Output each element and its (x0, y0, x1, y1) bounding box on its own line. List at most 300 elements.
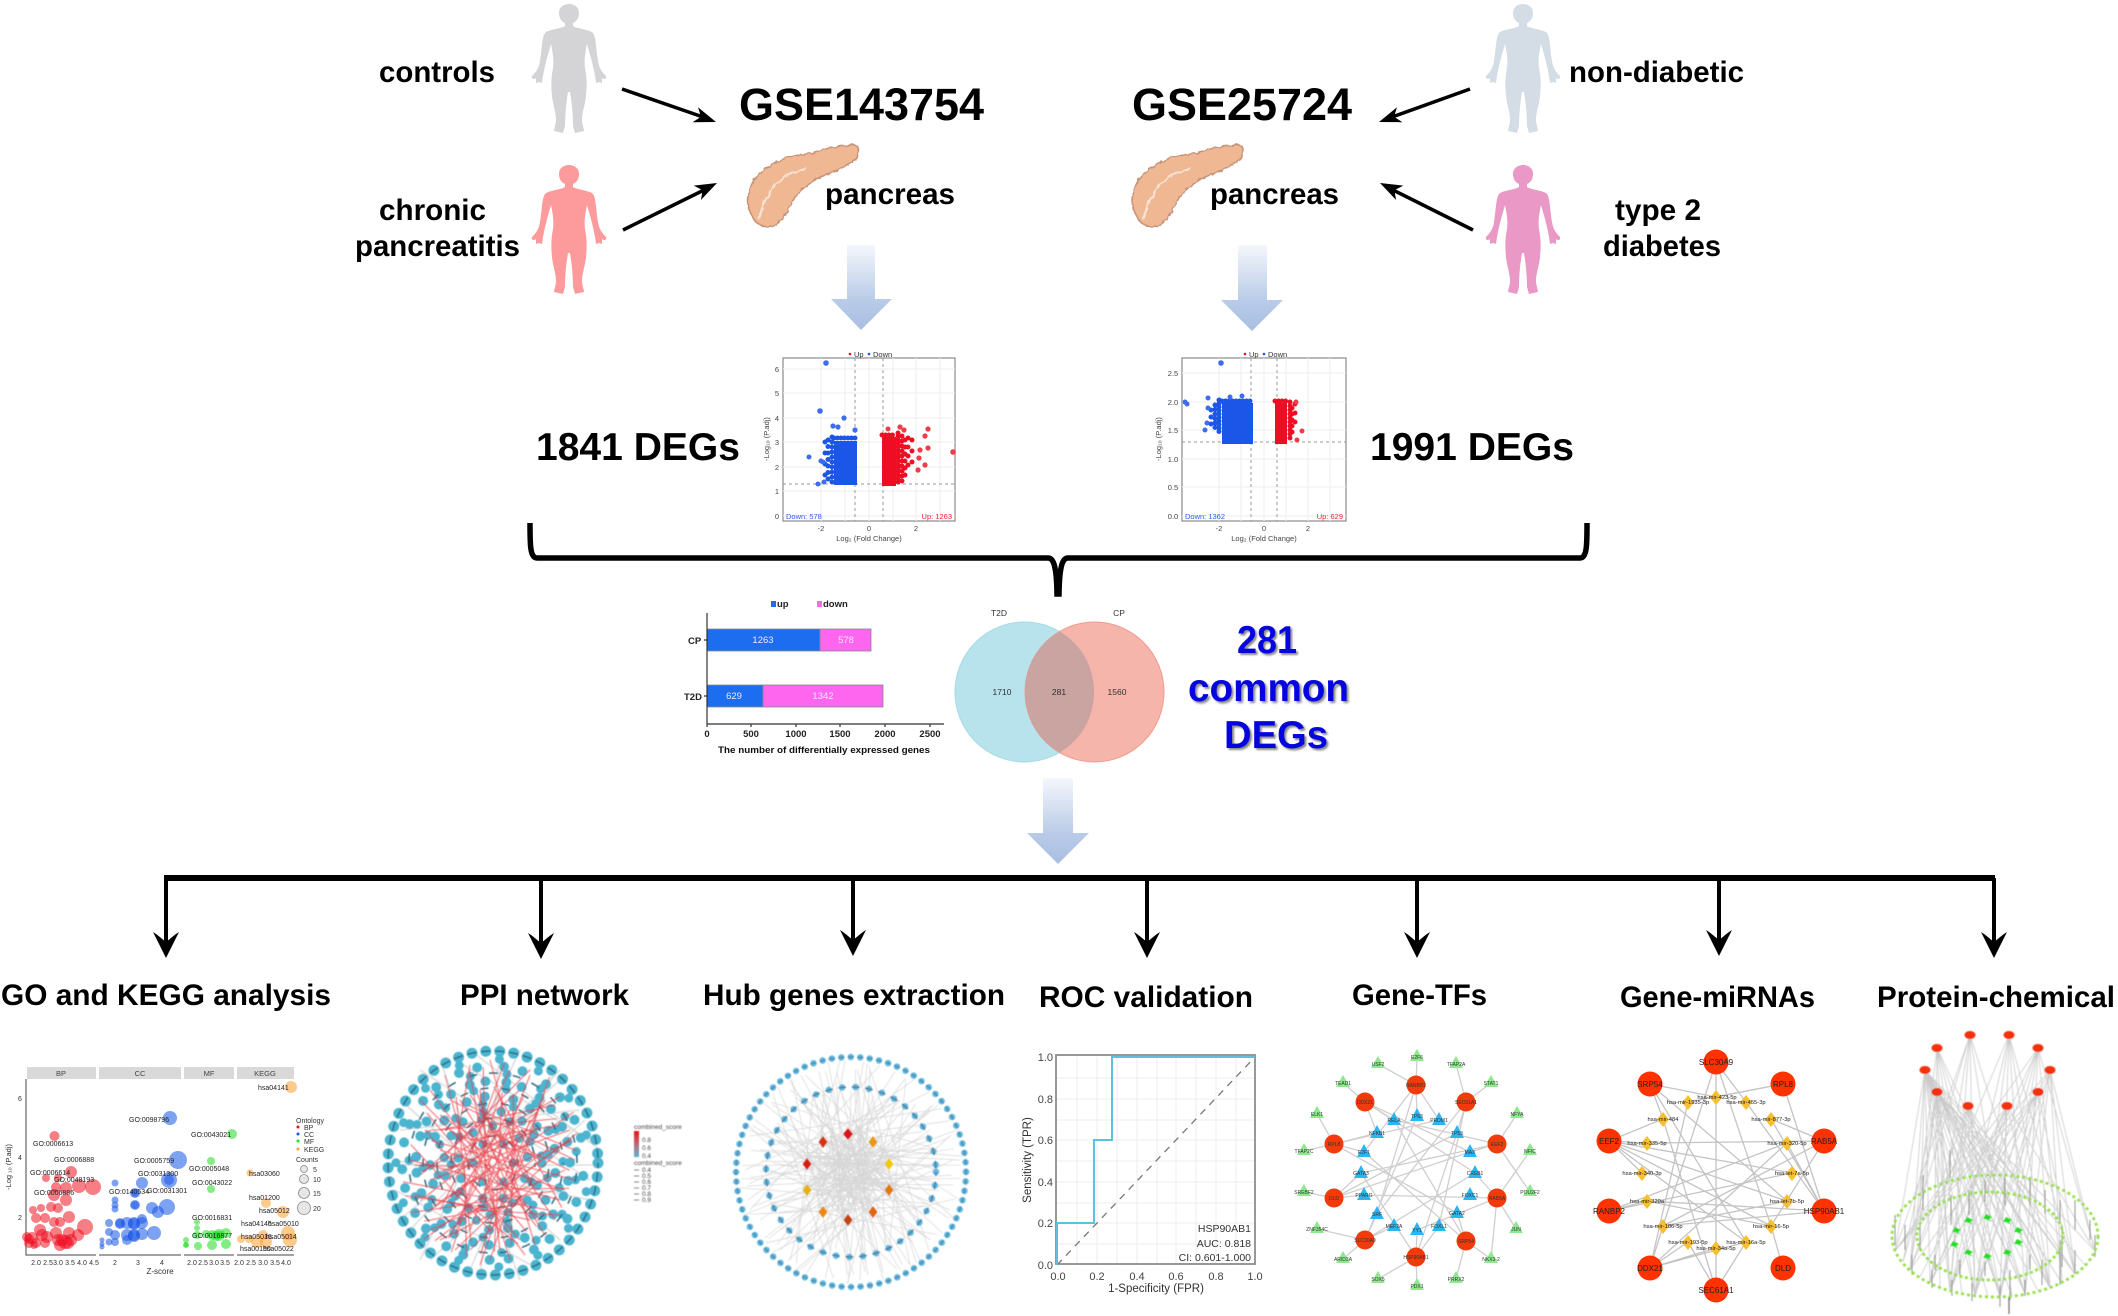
miRNA labels: hsa-mir-16a-5p (1726, 1240, 1766, 1246)
arrow: to hub genes extraction (840, 878, 866, 956)
chart: ROC curve: 0.2 (1089, 1271, 1105, 1283)
ROC annotation: AUC: 0.818 (1197, 1238, 1251, 1250)
node labels: USF2 (1372, 1062, 1385, 1068)
node labels: MAX (1465, 1150, 1476, 1156)
axis tick labels: 2 (18, 1215, 22, 1222)
term labels: GO:0098796 (129, 1117, 169, 1124)
chemical label strokes (1895, 1150, 2095, 1307)
term labels: GO:0031300 (138, 1171, 178, 1178)
axis tick labels: 2.5 (198, 1260, 208, 1267)
volcano axis labels (762, 365, 918, 543)
axis tick labels: 3.5 (65, 1260, 75, 1267)
CC bubbles (100, 1111, 187, 1250)
volcano plot: GSE143754 (762, 350, 956, 543)
network: Gene-miRNAs (1593, 1050, 1845, 1302)
edge score legend: 0.8 (642, 1191, 651, 1198)
grey edges (385, 1045, 600, 1280)
node labels: RELA (1387, 1118, 1401, 1124)
volcano legend (849, 350, 892, 359)
edges (1609, 1062, 1824, 1290)
term labels: GO:0031301 (147, 1188, 187, 1195)
miRNA labels: hsa-mir-34a-5p (1696, 1246, 1736, 1252)
KEGG bubbles (237, 1081, 297, 1248)
arrow: to Gene-TFs (1404, 878, 1430, 958)
node labels: ELK1 (1311, 1112, 1323, 1118)
hub gene nodes (802, 1128, 894, 1226)
arrow: chronic pancreatitis to GSE143754 (623, 183, 717, 230)
miRNA labels: hsa-mir-320a (1630, 1199, 1665, 1205)
volcano axis labels: 2 (1306, 524, 1310, 533)
label: type 2 diabetes: type 2 (1615, 194, 1701, 227)
legend: MF (304, 1139, 314, 1146)
bar tick labels: 0 (704, 729, 710, 740)
volcano axis labels: 0 (775, 512, 779, 521)
heading: GO and KEGG analysis: GO and KEGG analysis (1, 979, 331, 1012)
arrow: to ROC validation (1134, 878, 1160, 958)
node labels: SOX5 (1371, 1277, 1385, 1283)
label: chronic pancreatitis: pancreatitis (355, 230, 520, 263)
axis tick labels: 3.0 (209, 1260, 219, 1267)
bar legend (771, 599, 848, 610)
axis tick labels: -Log ₁₀ (P.adj) (4, 1144, 13, 1190)
miRNA labels: hsa-mir-16-5p (1753, 1224, 1789, 1230)
volcano axis labels: -Log₁₀ (P.adj) (762, 417, 771, 461)
volcano axis labels: Log₂ (Fold Change) (1231, 534, 1297, 543)
node labels: EEF2 (1491, 1142, 1503, 1148)
term labels: GO:0043021 (191, 1132, 231, 1139)
label: type 2 diabetes: diabetes (1603, 230, 1721, 263)
legend: 10 (313, 1177, 321, 1184)
node labels: ARID3A (1334, 1257, 1353, 1263)
edge score legend: 0.6 (642, 1145, 651, 1152)
miRNA labels: hsa-mir-484 (1648, 1117, 1679, 1123)
hub edges (697, 1018, 1006, 1316)
node labels: NFKB1 (1369, 1131, 1385, 1137)
gene labels (1593, 1058, 1845, 1295)
edge score legend: 0.4 (642, 1167, 651, 1174)
edge score legend: combined_score (634, 1160, 682, 1167)
volcano legend: Up (1249, 350, 1259, 359)
edges (1895, 1035, 2095, 1297)
miRNA labels: hsa-mir-455-3p (1726, 1100, 1766, 1106)
volcano plot: GSE25724 (1154, 350, 1346, 543)
ROC ticks: 0.8 (1038, 1094, 1053, 1106)
node labels (388, 1051, 598, 1275)
gene nodes (1324, 1076, 1506, 1266)
heading: ROC validation: ROC validation (1039, 981, 1253, 1014)
node labels: NFIC (1524, 1149, 1536, 1155)
term labels: GO:0016877 (192, 1233, 232, 1240)
bar values: 629 (726, 691, 742, 702)
legend: 5 (313, 1167, 317, 1174)
miRNA labels: hsa-mir-186-5p (1643, 1224, 1683, 1230)
miRNA labels: hsa-mir-320-5p (1767, 1141, 1807, 1147)
axis tick labels: 4 (160, 1260, 164, 1267)
network: Protein-chemical (1892, 1031, 2098, 1314)
term labels: hsa05010 (268, 1221, 299, 1228)
nodes (388, 1051, 598, 1275)
volcano axis labels: 0.0 (1168, 512, 1178, 521)
arrow: GSE25724 to volcano (1221, 245, 1283, 331)
arrow: to GO and KEGG analysis (153, 878, 179, 958)
bars (707, 629, 883, 707)
miRNA labels: hsa-mir-340-3p (1622, 1171, 1662, 1177)
legend: Ontology (296, 1118, 325, 1125)
volcano axis labels: 2 (775, 463, 779, 472)
label: 1991 DEGs: 1991 DEGs (1370, 426, 1574, 469)
term labels (30, 1085, 299, 1253)
node labels: SRF (1372, 1212, 1382, 1218)
axes (26, 1079, 294, 1255)
bar legend: down (823, 599, 848, 610)
outer transcription factors (1297, 1049, 1537, 1290)
legend: 15 (313, 1191, 321, 1198)
legend: CC (304, 1132, 314, 1139)
term labels: GO:0043022 (192, 1180, 232, 1187)
volcano axis labels: 5 (775, 389, 779, 398)
volcano axis labels: -2 (1216, 524, 1222, 533)
term labels: hsa03060 (249, 1171, 280, 1178)
node labels: PRDM1 (1430, 1118, 1448, 1124)
volcano legend: Down (1268, 350, 1287, 359)
person: controls (532, 4, 606, 133)
miRNA labels: hsa-mir-335-5p (1627, 1141, 1667, 1147)
axis tick labels: 4.5 (89, 1260, 99, 1267)
chart: ROC curve: 0.8 (1208, 1271, 1224, 1283)
edge score legend (634, 1124, 682, 1204)
node labels: RPL8 (1328, 1142, 1340, 1148)
facet strips (27, 1067, 294, 1079)
icon: pancreas right (1132, 145, 1243, 227)
term labels: hsa04146 (241, 1221, 272, 1228)
term labels: hsa00190 (240, 1246, 271, 1253)
node labels: PDX1 (1410, 1284, 1424, 1290)
branching line (164, 875, 1995, 881)
bar tick labels: 500 (743, 729, 759, 740)
heading: Hub genes extraction: Hub genes extraction (703, 979, 1005, 1012)
heading: Protein-chemical: Protein-chemical (1877, 981, 2115, 1014)
node labels: NFYA (1511, 1112, 1524, 1118)
ROC ticks: 1.0 (1038, 1052, 1053, 1064)
volcano axis labels: 0 (1262, 524, 1266, 533)
volcano axis labels: 1.0 (1168, 455, 1178, 464)
axis tick labels: 4.0 (77, 1260, 87, 1267)
node labels: E2F1 (1358, 1150, 1370, 1156)
axis tick labels: 2.0 (187, 1260, 197, 1267)
bar axis labels (684, 636, 702, 703)
label: type 2 diabetes (1603, 194, 1721, 263)
node labels: TFAP2C (1295, 1149, 1314, 1155)
label: chronic pancreatitis: chronic (379, 194, 486, 227)
network: PPI (367, 1031, 682, 1294)
node labels: TEAD1 (1335, 1081, 1351, 1087)
chart: ROC curve: 0.0 (1050, 1271, 1066, 1283)
MF bubbles (183, 1129, 237, 1250)
term labels: GO:0005759 (134, 1158, 174, 1165)
node labels: STAT1 (1484, 1081, 1499, 1087)
edge score legend: 0.4 (642, 1153, 651, 1160)
node labels: TP53 (1451, 1131, 1463, 1137)
node labels: DLD (1329, 1196, 1339, 1202)
arrow: type 2 diabetes to GSE25724 (1380, 183, 1473, 230)
heading: Gene-miRNAs: Gene-miRNAs (1620, 981, 1815, 1014)
term labels: GO:0006614 (30, 1170, 70, 1177)
volcano counts: Down: 1362 (1185, 512, 1225, 521)
term labels: GO:0006888 (54, 1157, 94, 1164)
network: Gene-TFs (1294, 1049, 1540, 1290)
ROC annotation: CI: 0.601-1.000 (1179, 1252, 1251, 1264)
node labels: TP63 (1411, 1114, 1423, 1120)
bar axis title: The number of differentially expressed genes (718, 745, 930, 756)
chart: ROC curve (1022, 1052, 1263, 1295)
node labels: PRRX2 (1448, 1277, 1465, 1283)
arrow: common DEGs to analyses (1027, 778, 1089, 864)
volcano legend (1244, 350, 1287, 359)
label: pancreas right: pancreas (1210, 178, 1339, 211)
bar axes (704, 613, 944, 727)
venn diagram: 1560 (1108, 687, 1127, 697)
facet titles: BP (56, 1069, 66, 1078)
bar tick labels: 2000 (874, 729, 896, 740)
node labels: SRP54 (1458, 1239, 1474, 1245)
venn diagram: CP (1113, 608, 1125, 618)
node labels: FOXL1 (1431, 1224, 1447, 1230)
ROC ticks: 0.2 (1038, 1218, 1053, 1230)
ROC ticks: 0.0 (1038, 1260, 1053, 1272)
venn diagram: 281 (1052, 687, 1066, 697)
bar values: 578 (838, 635, 854, 646)
node labels: POU2F2 (1520, 1190, 1540, 1196)
axis tick labels: 2 (113, 1260, 117, 1267)
volcano axis labels: 2.5 (1168, 369, 1178, 378)
bar tick labels: 1000 (785, 729, 807, 740)
miRNA labels: hsa-let-7a-5p (1775, 1171, 1809, 1177)
green chemical rings (1892, 1175, 2098, 1297)
callout: 281 common DEGs (1188, 619, 1349, 757)
edge score legend: 0.9 (642, 1197, 651, 1204)
gene labels: SEC61A1 (1698, 1286, 1734, 1295)
node labels: SEC61A1 (1455, 1100, 1477, 1106)
node labels: DDX21 (1357, 1100, 1373, 1106)
node labels: JUN (1511, 1227, 1521, 1233)
node labels: RANBP2 (1406, 1083, 1426, 1089)
miRNA labels: hsa-mir-1935-3p (1667, 1100, 1709, 1106)
node labels: SREBF2 (1294, 1190, 1314, 1196)
node labels: HSP90AB1 (1403, 1255, 1429, 1261)
node labels: E2F6 (1411, 1055, 1423, 1061)
venn diagram (955, 608, 1164, 762)
heading: PPI network: PPI network (460, 979, 629, 1012)
callout: 281 common DEGs: DEGs (1224, 714, 1328, 757)
chart: ROC curve: 0.4 (1129, 1271, 1145, 1283)
label: non-diabetic: non-diabetic (1569, 56, 1744, 89)
legend: BP (304, 1125, 314, 1132)
bar axis labels: CP (688, 636, 702, 647)
brace joining both datasets (530, 523, 1587, 594)
node labels: MEF2A (1386, 1224, 1403, 1230)
ROC axis titles: Sensitivity (TPR) (1022, 1117, 1034, 1203)
term labels: hsa05022 (263, 1246, 294, 1253)
edge score legend: combined_score (634, 1124, 682, 1131)
axis tick labels: 2.5 (43, 1260, 53, 1267)
volcano axis labels: 0.5 (1168, 483, 1178, 492)
volcano counts: Up: 629 (1317, 512, 1343, 521)
chart: ROC curve: 0.6 (1168, 1271, 1184, 1283)
bar legend: up (777, 599, 789, 610)
node labels: YY1 (1412, 1228, 1422, 1234)
bar chart: number of DEGs (684, 599, 944, 756)
miRNA labels (1622, 1095, 1809, 1252)
term labels: GO:0016831 (192, 1215, 232, 1222)
gene labels: SRP54 (1637, 1080, 1663, 1089)
node labels: RAB5A (1489, 1196, 1506, 1202)
axis tick labels: 3.0 (258, 1260, 268, 1267)
bar tick labels (704, 729, 941, 740)
legend: 20 (313, 1206, 321, 1213)
gene nodes (1596, 1050, 1836, 1302)
miRNA labels: hsa-let-7b-5p (1770, 1199, 1804, 1205)
bar values (726, 635, 854, 702)
inner chemical nodes (1950, 1214, 2023, 1261)
axis tick labels: 2.5 (246, 1260, 256, 1267)
gene labels: RPL8 (1773, 1080, 1794, 1089)
volcano counts (1185, 512, 1343, 521)
edges (1304, 1057, 1530, 1286)
ROC axis titles: 1-Specificity (FPR) (1108, 1283, 1204, 1295)
gene labels: RANBP2 (1593, 1207, 1626, 1216)
node labels (1294, 1055, 1540, 1290)
person: non-diabetic (1486, 4, 1560, 133)
network: hub genes (697, 1018, 1006, 1316)
axis tick labels: 3.0 (53, 1260, 63, 1267)
volcano legend: Up (854, 350, 864, 359)
term labels: hsa05014 (266, 1234, 297, 1241)
venn diagram: T2D (991, 608, 1007, 618)
edge score legend: 0.5 (642, 1173, 651, 1180)
volcano axis labels: 1.5 (1168, 426, 1178, 435)
miRNA labels: hsa-mir-423-5p (1697, 1095, 1737, 1101)
volcano axis labels (1154, 369, 1310, 543)
arrow: to PPI network (528, 878, 554, 959)
volcano counts: Up: 1263 (922, 512, 952, 521)
volcano counts: Down: 578 (786, 512, 822, 521)
arrow: to Protein-chemical (1981, 878, 2007, 958)
volcano axis labels: 2.0 (1168, 398, 1178, 407)
callout: 281 common DEGs: 281 (1237, 619, 1297, 662)
term labels: GO:0005048 (189, 1166, 229, 1173)
volcano axis labels: 6 (775, 365, 779, 374)
term labels: GO:0006613 (33, 1141, 73, 1148)
node labels: PPARG (1355, 1193, 1373, 1199)
label: controls: controls (379, 56, 495, 89)
heading: GSE143754: GSE143754 (739, 79, 984, 130)
edge score legend: 0.6 (642, 1179, 651, 1186)
facet titles (56, 1069, 276, 1078)
person: type 2 diabetes (1486, 165, 1560, 294)
node labels: NKX3-2 (1482, 1257, 1500, 1263)
node labels: FOXC1 (1462, 1193, 1479, 1199)
gene labels: SLC30A9 (1699, 1058, 1734, 1067)
gene labels: EEF2 (1599, 1137, 1620, 1146)
bar values: 1263 (752, 635, 774, 646)
volcano axis labels: -2 (818, 524, 824, 533)
bar values: 1342 (812, 691, 834, 702)
axis tick labels: 3.5 (220, 1260, 230, 1267)
inner transcription factors (1354, 1108, 1482, 1235)
tail label (2008, 1297, 2010, 1314)
axis tick labels: 6 (18, 1096, 22, 1103)
arrow: controls to GSE143754 (622, 89, 716, 122)
arrow: GSE143754 to volcano (831, 245, 892, 330)
volcano axis labels: 0 (867, 524, 871, 533)
node labels: TFAP2A (1447, 1062, 1466, 1068)
volcano axis labels: 2 (914, 524, 918, 533)
node labels: ZNF354C (1306, 1227, 1328, 1233)
volcano axis labels: -Log₁₀ (P.adj) (1154, 417, 1163, 461)
node labels: GATA3 (1353, 1171, 1369, 1177)
term labels: hsa05012 (259, 1208, 290, 1215)
ROC ticks: 0.4 (1038, 1177, 1053, 1189)
heading: GSE25724: GSE25724 (1132, 79, 1352, 130)
miRNA nodes (1636, 1090, 1798, 1256)
axis tick labels: 4 (18, 1155, 22, 1162)
bar axis labels: T2D (684, 692, 702, 703)
facet titles: CC (135, 1069, 146, 1078)
facet titles: KEGG (254, 1069, 276, 1078)
term labels: hsa05016 (241, 1234, 272, 1241)
outer and middle gene rings (736, 1057, 966, 1287)
arrow: non-diabetic to GSE25724 (1379, 89, 1470, 122)
ROC annotation (1179, 1223, 1251, 1264)
term labels: GO:0006886 (34, 1190, 74, 1197)
node labels: CREB1 (1467, 1171, 1484, 1177)
axis tick labels: 4.0 (281, 1260, 291, 1267)
axis tick labels: 3 (136, 1260, 140, 1267)
ROC annotation: HSP90AB1 (1198, 1223, 1251, 1235)
ROC axis titles (1022, 1117, 1204, 1295)
axis tick labels: 3.5 (270, 1260, 280, 1267)
BP bubbles (22, 1131, 101, 1251)
term labels: hsa01200 (249, 1195, 280, 1202)
axis tick labels (4, 1096, 291, 1276)
term labels: GO:0140534 (109, 1189, 149, 1196)
node labels: GATA2 (1449, 1211, 1465, 1217)
ROC ticks (1038, 1052, 1053, 1272)
callout: 281 common DEGs: common (1188, 667, 1349, 710)
facet titles: MF (204, 1069, 215, 1078)
axis tick labels: 2.0 (234, 1260, 244, 1267)
bar tick labels: 2500 (919, 729, 941, 740)
gene labels: RAB5A (1811, 1137, 1838, 1146)
term labels: GO:0048193 (54, 1177, 94, 1184)
gene labels: HSP90AB1 (1804, 1207, 1845, 1216)
person: chronic pancreatitis (532, 165, 606, 294)
ROC ticks: 0.6 (1038, 1135, 1053, 1147)
bar tick labels: 1500 (829, 729, 851, 740)
label: 1841 DEGs: 1841 DEGs (536, 426, 740, 469)
chart: GO and KEGG bubble plot (4, 1067, 325, 1276)
miRNA labels: hsa-mir-877-3p (1751, 1117, 1791, 1123)
volcano axis labels: Log₂ (Fold Change) (836, 534, 902, 543)
axis tick labels: Z-score (146, 1267, 174, 1276)
volcano legend: Down (873, 350, 892, 359)
arrow: to Gene-miRNAs (1706, 878, 1732, 956)
label: chronic pancreatitis (355, 194, 520, 263)
volcano axis labels: 4 (775, 414, 779, 423)
legend (296, 1118, 325, 1214)
icon: pancreas left (748, 145, 858, 227)
gene labels: DLD (1775, 1264, 1791, 1273)
